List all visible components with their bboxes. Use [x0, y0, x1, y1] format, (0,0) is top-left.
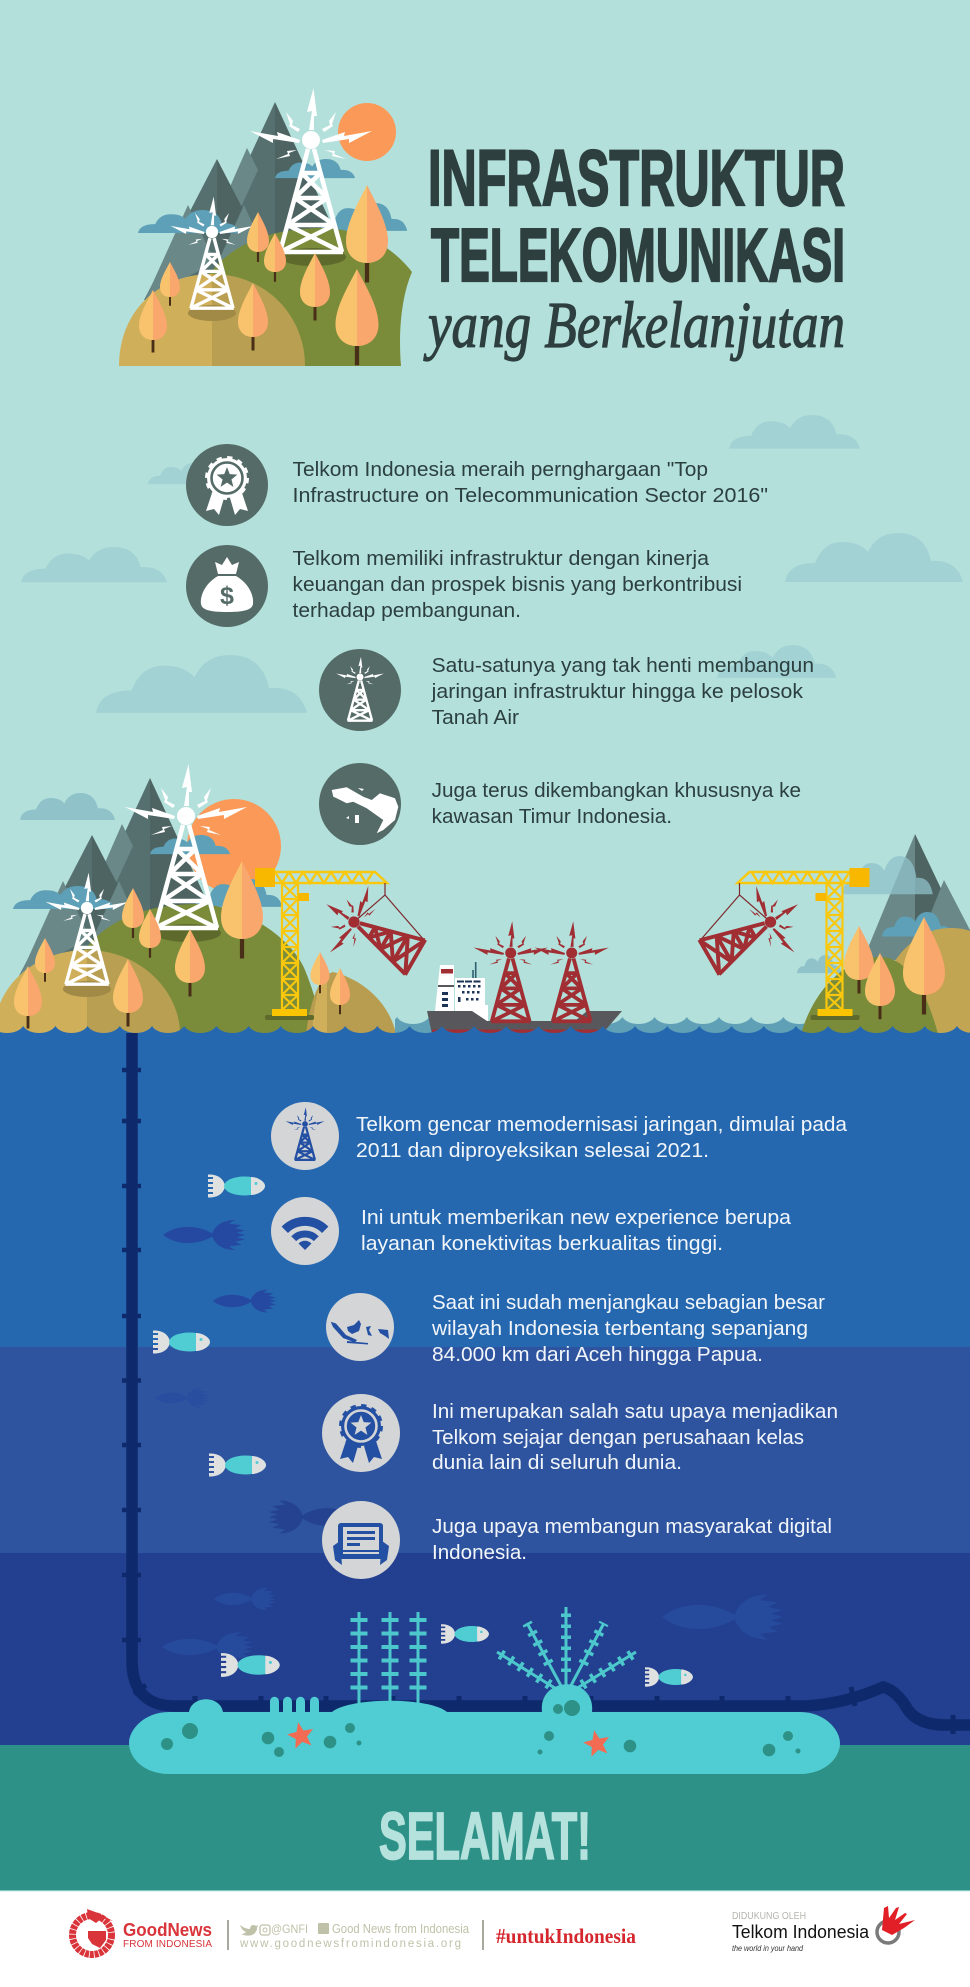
mountains and clouds — [138, 102, 407, 300]
coral fan — [497, 1607, 636, 1695]
icon: money bag: $ — [220, 582, 234, 610]
icon: tablet — [322, 1501, 400, 1579]
sponsor text: the world in your hand — [732, 1944, 803, 1953]
logo: GoodNews emblem — [72, 1909, 113, 1954]
reef body — [129, 1684, 840, 1774]
text: modernisation: Telkom gencar memodernisasi jaringan, dimulai pada — [356, 1113, 848, 1136]
text: world class: Ini merupakan salah satu upaya menjadikan — [432, 1400, 838, 1423]
heading: selamat: SELAMAT! — [379, 1799, 591, 1874]
text: reach: Saat ini sudah menjangkau sebagian besar — [432, 1291, 825, 1314]
text: performance: Telkom memiliki infrastruktur dengan kinerja — [292, 547, 710, 570]
background clouds — [21, 415, 963, 713]
logo: Telkom — [877, 1906, 915, 1943]
reef — [129, 1607, 840, 1774]
text: connectivity — [361, 1206, 792, 1255]
bright fish — [153, 1174, 693, 1687]
hashtag: #untukIndonesia — [496, 1924, 636, 1948]
keel — [432, 1030, 604, 1034]
icon: money bag — [186, 545, 268, 627]
icon: tower blue — [271, 1102, 339, 1170]
sky background — [0, 0, 970, 1040]
text: modernisation — [356, 1113, 848, 1162]
text: digital society: Juga upaya membangun masyarakat digital — [432, 1515, 832, 1538]
social links: Good News from Indonesia — [332, 1922, 469, 1936]
social links: www.goodnewsfromindonesia.org — [239, 1938, 461, 1950]
logo: GoodNews wordmark: GoodNews — [123, 1920, 212, 1940]
text: Papua — [432, 779, 801, 828]
sponsor text: DIDUKUNG OLEH — [732, 1910, 806, 1922]
title — [423, 133, 845, 362]
text: connectivity: layanan konektivitas berkualitas tinggi. — [361, 1232, 723, 1255]
sea layers — [0, 1033, 970, 1890]
towers and trees — [14, 764, 263, 1028]
text: digital society — [432, 1515, 832, 1564]
tan hill — [870, 928, 970, 1034]
text: reach — [431, 1291, 825, 1366]
text: performance: keuangan dan prospek bisnis yang berkontribusi — [292, 573, 742, 596]
text: tower: jaringan infrastruktur hingga ke pelosok — [431, 680, 804, 703]
crane left — [255, 868, 434, 1020]
text: performance — [292, 547, 742, 622]
funnel — [435, 965, 454, 1011]
text: connectivity: Ini untuk memberikan new experience berupa — [361, 1206, 792, 1229]
text: award: Infrastructure on Telecommunication Sector 2016" — [292, 484, 768, 507]
text: reach: wilayah Indonesia terbentang sepanjang — [431, 1317, 808, 1340]
text: world class — [432, 1400, 838, 1474]
icon: tower — [319, 649, 401, 731]
logo: GoodNews wordmark: FROM INDONESIA — [123, 1939, 212, 1950]
text: world class: dunia lain di seluruh dunia. — [432, 1451, 682, 1474]
text: tower: Satu-satunya yang tak henti membangun — [432, 654, 814, 677]
cargo towers — [473, 921, 609, 1021]
social links — [239, 1922, 469, 1950]
text: award: Telkom Indonesia meraih pernghargaan "Top — [292, 458, 708, 481]
text: tower: Tanah Air — [432, 706, 519, 729]
towers and trees — [139, 88, 388, 352]
water scallops — [0, 1026, 970, 1034]
illustration: top hills with towers — [119, 88, 412, 366]
mast — [473, 962, 476, 978]
green hill — [205, 228, 412, 366]
text: award — [292, 458, 768, 507]
text: digital society: Indonesia. — [432, 1541, 527, 1564]
shore hill — [306, 972, 396, 1034]
logo: GoodNews wordmark — [123, 1920, 212, 1950]
illustration: right island — [690, 834, 970, 1034]
icon: award — [186, 444, 268, 526]
text: world class: Telkom sejajar dengan perusahaan kelas — [432, 1426, 804, 1449]
divider — [227, 1920, 229, 1950]
back waves — [395, 1017, 815, 1034]
text: tower — [431, 654, 814, 729]
text: performance: terhadap pembangunan. — [292, 599, 521, 622]
mountains and clouds — [13, 778, 282, 976]
light cloud — [20, 793, 115, 820]
icon: award blue — [322, 1394, 400, 1472]
icon: wifi — [271, 1197, 339, 1265]
mountains — [863, 834, 970, 960]
divider — [482, 1920, 484, 1950]
dark fish silhouettes — [155, 1220, 783, 1662]
sun — [338, 103, 396, 161]
large foreground tree — [336, 269, 378, 365]
sun — [187, 799, 281, 893]
footer — [0, 1890, 970, 1987]
clouds — [797, 856, 953, 973]
icon: Papua map — [319, 763, 401, 845]
seaweed — [359, 1612, 418, 1705]
sponsor text: Telkom Indonesia — [732, 1922, 870, 1942]
ship — [427, 921, 622, 1034]
text: Papua: Juga terus dikembangkan khususnya ke — [432, 779, 801, 802]
title: yang Berkelanjutan — [423, 289, 845, 362]
crane right — [690, 868, 870, 1020]
social links: @GNFI — [271, 1922, 308, 1936]
hull — [427, 1011, 622, 1034]
starfish — [285, 1720, 612, 1758]
sponsor text — [732, 1910, 870, 1953]
cable pipe — [122, 1033, 970, 1734]
text: reach: 84.000 km dari Aceh hingga Papua. — [432, 1343, 763, 1366]
green hill — [80, 904, 323, 1034]
tan hill — [119, 274, 305, 366]
shore trees — [310, 952, 350, 1014]
illustration: left island — [0, 764, 434, 1034]
green hill — [801, 957, 938, 1034]
icon: Indonesia map — [326, 1293, 394, 1361]
tan hill — [0, 950, 180, 1034]
reef spots — [161, 1700, 800, 1757]
trees — [844, 917, 945, 1019]
text: Papua: kawasan Timur Indonesia. — [432, 805, 672, 828]
cabin — [455, 978, 488, 1021]
text: modernisation: 2011 dan diproyeksikan selesai 2021. — [356, 1139, 709, 1162]
